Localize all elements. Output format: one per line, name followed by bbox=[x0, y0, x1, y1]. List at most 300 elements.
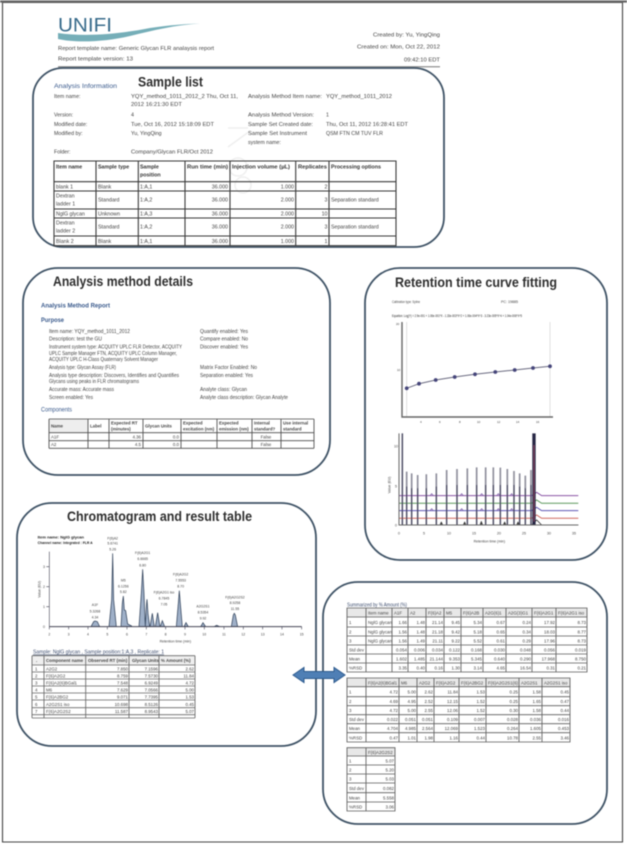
table: summary part 1: 21.11 bbox=[432, 638, 444, 644]
table: summary part 2: 12.15 bbox=[447, 699, 459, 704]
table: summary part 3: %RSD bbox=[349, 804, 362, 810]
table: summary part 1: 5.34 bbox=[473, 620, 483, 625]
table: component results: M6 bbox=[46, 688, 53, 692]
table: summary part 3: F(6)A2G2S2 bbox=[368, 750, 393, 755]
table: component results: 7.548 bbox=[117, 680, 129, 686]
table: summary part 1: 0.168 bbox=[471, 648, 483, 652]
table: summary part 1: 9.42 bbox=[451, 630, 461, 634]
table: components: 4.36 bbox=[132, 434, 142, 440]
analysis information text: Folder: bbox=[54, 150, 70, 156]
purpose text block: Screen enabled: Yes bbox=[49, 395, 93, 401]
chart: glycan chromatogram: 6.7845 bbox=[159, 596, 169, 600]
table: summary part 2: 12.06 bbox=[447, 708, 459, 713]
table: component results: Component name bbox=[46, 658, 84, 663]
table: sample list: ladder 1 bbox=[56, 202, 75, 208]
table: summary part 1 bbox=[347, 608, 587, 672]
purpose text block: Accurate mass: Accurate mass bbox=[49, 387, 114, 393]
chart: overlaid dextran ladder chromatograms: 10 bbox=[394, 445, 398, 449]
table: component results: 2 bbox=[35, 674, 38, 678]
table: component results: 11.84 bbox=[183, 674, 195, 678]
table: summary part 1: A2G(3)G1 bbox=[508, 610, 529, 616]
table: summary part 1: 18.03 bbox=[544, 630, 556, 634]
table: summary part 1: 1.485 bbox=[414, 656, 426, 662]
table: sample list: 1:A,1 bbox=[140, 184, 152, 190]
table: sample list: 36.000 bbox=[212, 224, 228, 230]
table: summary part 1: 0.31 bbox=[546, 666, 556, 670]
chart: glycan chromatogram: Channel name: Integrated : FLR A bbox=[38, 541, 93, 545]
table: summary part 2: 1.01 bbox=[407, 736, 417, 740]
chart: overlaid dextran ladder chromatograms: 0 bbox=[398, 531, 400, 535]
table: summary part 2: A2G2S1 bbox=[521, 680, 538, 686]
table: sample list: 1:A,3 bbox=[140, 212, 152, 218]
table: summary part 2: 1.52 bbox=[476, 699, 486, 704]
table: summary part 2: 3 bbox=[349, 708, 352, 713]
table: components: Internal bbox=[254, 420, 270, 426]
analysis information text: Analysis Information bbox=[54, 84, 117, 90]
table: summary part 3: Std dev bbox=[349, 786, 365, 791]
table: summary part 1: 1.56 bbox=[398, 630, 408, 634]
chart: glycan chromatogram: 4.34 bbox=[92, 615, 98, 619]
chart: overlaid dextran ladder chromatograms: 25 bbox=[522, 531, 526, 535]
chart: glycan chromatogram: 9.92 bbox=[200, 617, 206, 621]
purpose text block: Glycans using peaks in FLR chromatograms bbox=[49, 379, 139, 385]
table: summary part 1: NglG glycan bbox=[368, 620, 392, 625]
table: summary part 3: 5.03 bbox=[385, 776, 395, 782]
analysis information text: Version: bbox=[54, 112, 73, 118]
table: summary part 1: 0.67 bbox=[496, 620, 506, 625]
table: components: excitation (nm) bbox=[183, 426, 215, 432]
table: component results: 5.00 bbox=[185, 688, 195, 692]
analysis information text: Yu, YingQing bbox=[131, 131, 162, 137]
table: sample list: 10 bbox=[322, 212, 328, 218]
line chart: calibration curve: 8 bbox=[459, 420, 461, 424]
table: components: 4.5 bbox=[135, 442, 142, 447]
table: summary part 1: 0.65 bbox=[496, 630, 506, 634]
table: summary part 2: F(6)A2G2 bbox=[436, 680, 456, 686]
table: summary part 1: F(6)A2G1 iso bbox=[558, 610, 585, 616]
table: component results: 5 bbox=[35, 694, 38, 700]
table: component results: 7.7395 bbox=[145, 694, 159, 700]
table: component results: Observed RT (min) bbox=[88, 658, 128, 663]
chart: glycan chromatogram: 10 bbox=[202, 632, 206, 636]
table: summary part 2: 0.036 bbox=[530, 717, 542, 722]
table: summary part 1: 1.56 bbox=[398, 638, 408, 644]
table: summary part 1: 0.048 bbox=[520, 648, 532, 652]
table: summary part 1: 0.019 bbox=[575, 648, 587, 652]
chart: glycan chromatogram: 15 bbox=[300, 632, 304, 636]
table: component results: A2G2 bbox=[46, 666, 58, 672]
chart: overlaid dextran ladder chromatograms: Value (EU) bbox=[388, 477, 392, 493]
table: summary part 1: F(6)A2G1 bbox=[534, 610, 554, 616]
table: summary part 1: 1.66 bbox=[398, 620, 408, 625]
table: summary part 1: 16.54 bbox=[520, 666, 532, 670]
purpose text block bbox=[41, 318, 288, 401]
chart: glycan chromatogram: 8.70 bbox=[177, 584, 184, 588]
line chart: calibration curve: 12 bbox=[497, 420, 501, 424]
table: component results: F(6)A2(6)BGal1 bbox=[46, 680, 78, 686]
table: component results: 8.9543 bbox=[145, 709, 159, 714]
analysis information text: Item name: bbox=[54, 94, 80, 100]
table: sample list: blank 1 bbox=[56, 184, 73, 190]
table: summary part 1: 0.122 bbox=[449, 648, 461, 652]
icon: UNIFI logo bbox=[58, 16, 200, 41]
table: components: 0.0 bbox=[173, 442, 180, 447]
chart: glycan chromatogram: 13 bbox=[261, 632, 265, 636]
table: summary part 1: 21.18 bbox=[432, 630, 444, 634]
analysis information text: QSM FTN CM TUV FLR bbox=[326, 131, 383, 137]
table: summary part 1: 21.144 bbox=[430, 656, 444, 662]
purpose text block: Compare enabled: No bbox=[200, 336, 248, 342]
chart: glycan chromatogram: 8.5354 bbox=[198, 611, 208, 615]
panel: retention time curve fitting bbox=[365, 268, 607, 560]
table: sample list: ladder 2 bbox=[56, 228, 75, 234]
table: sample list: 1:A,1 bbox=[140, 239, 152, 245]
table: summary part 2: F(6)A2G2S1(6) bbox=[488, 680, 519, 686]
sample caption: Sample: NglG glycan , Sample position:1:A,3 , Replicate: 1 bbox=[33, 650, 164, 656]
purpose text block: Matrix Factor Enabled: No bbox=[200, 365, 257, 371]
table: summary part 3 bbox=[347, 748, 395, 811]
line chart: calibration curve: 20 bbox=[396, 322, 400, 326]
table: component results: 0.45 bbox=[185, 702, 195, 707]
table: component results: F(6)A2G2S2 bbox=[46, 709, 71, 714]
table: components: Glycan Units bbox=[145, 424, 172, 428]
table: component results: . bbox=[36, 658, 37, 663]
chart: glycan chromatogram: A1F bbox=[92, 603, 98, 607]
line chart: calibration curve: 16 bbox=[536, 420, 540, 424]
calibration details: Calibration type: Spline bbox=[392, 300, 420, 304]
table: summary part 3: 3 bbox=[349, 776, 352, 782]
chart: glycan chromatogram: F(6)A2G1 iso bbox=[154, 591, 174, 595]
table: summary part 2: 1.16 bbox=[449, 736, 459, 740]
table: summary part 2: 1.58 bbox=[532, 708, 542, 713]
table: summary part 1: 0.29 bbox=[522, 638, 532, 644]
table: summary part 2: A2G2 bbox=[419, 680, 431, 686]
chart: glycan chromatogram: F(6)A2G2S2 bbox=[225, 595, 245, 599]
analysis information text: system name: bbox=[248, 140, 281, 146]
table: sample list: 3 bbox=[325, 198, 328, 204]
table: sample list: 1:A,2 bbox=[140, 224, 152, 230]
table: summary part 2: 0.44 bbox=[476, 736, 486, 740]
table: summary part 2: 1.52 bbox=[476, 708, 486, 713]
analysis information text: Thu, Oct 11, 2012 16:28:41 EDT bbox=[326, 122, 409, 128]
table: summary part 2: 4.704 bbox=[387, 726, 399, 731]
table: summary part 2: 1.58 bbox=[532, 690, 542, 694]
table: components: A2 bbox=[51, 442, 57, 447]
table: summary part 3: 0.082 bbox=[383, 786, 395, 791]
table: component results: 9.071 bbox=[117, 694, 129, 700]
chart: glycan chromatogram: 7 bbox=[145, 632, 147, 636]
report template details bbox=[58, 46, 215, 62]
subheading: analysis method report: Analysis Method Report bbox=[41, 304, 110, 310]
chart: glycan chromatogram: 8.9258 bbox=[230, 601, 240, 605]
line chart: calibration curve: 6 bbox=[439, 420, 441, 424]
table: sample list: Standard bbox=[98, 224, 120, 230]
table: summary part 2: 0.264 bbox=[507, 726, 519, 731]
table: summary part 2: 4.72 bbox=[389, 708, 399, 713]
analysis information text: Sample Set Instrument bbox=[248, 131, 308, 137]
table: summary part 2: 0.007 bbox=[474, 717, 486, 722]
table: summary part 2: 1.605 bbox=[530, 726, 542, 731]
table: summary part 1: 1.48 bbox=[416, 620, 426, 625]
line chart: calibration curve: 10 bbox=[477, 420, 481, 424]
table: summary part 2: 4.69 bbox=[389, 699, 399, 704]
analysis information text: Sample Set Created date: bbox=[248, 122, 313, 128]
table: component results: 4.72 bbox=[185, 680, 195, 686]
calibration details: Equation: Log(Y) = 2.9e-001 + 1.06e-001*X - 1.33e-003*X^2 + 1.06e-004*X^3 - 3.23e-005*X^4 + 1.04e-006*X^5 bbox=[392, 314, 522, 318]
table: sample list: Processing options bbox=[331, 164, 381, 170]
table: sample list: 1.000 bbox=[281, 184, 294, 190]
table: components: False bbox=[261, 442, 272, 447]
table: summary part 1: NglG glycan bbox=[368, 630, 392, 634]
table: component results: 1.53 bbox=[185, 694, 195, 700]
table: summary part 2: 4.985 bbox=[405, 726, 417, 731]
table: sample list: 2 bbox=[325, 184, 328, 190]
analysis information text: 1 bbox=[326, 112, 329, 118]
chart: glycan chromatogram: 11 bbox=[222, 632, 226, 636]
table: summary part 1: 0.34 bbox=[522, 630, 532, 634]
table: sample list: Separation standard bbox=[331, 198, 379, 204]
table: summary part 1: 0.16 bbox=[434, 666, 444, 670]
chart: glycan chromatogram: 7.5553 bbox=[175, 578, 186, 582]
table: sample list: 36.000 bbox=[212, 184, 228, 190]
chart: glycan chromatogram: M5 bbox=[121, 579, 126, 583]
table: summary part 2: M6 bbox=[401, 680, 408, 686]
chart: overlaid dextran ladder chromatograms: 5 bbox=[395, 485, 397, 489]
table: summary part 2: 0.25 bbox=[509, 699, 519, 704]
table: component results: 6.9249 bbox=[145, 680, 159, 686]
table: summary part 1: NglG glycan bbox=[368, 638, 392, 644]
table: summary part 1: 1 bbox=[349, 620, 352, 625]
analysis information text: Analysis Method Item name: bbox=[248, 94, 322, 100]
table: summary part 2: F(6)A2BG2 bbox=[461, 680, 484, 686]
table: summary part 1: F(6)A2B bbox=[463, 610, 479, 616]
table: summary part 3: 2 bbox=[349, 768, 352, 772]
table: component results: 5.07 bbox=[185, 709, 195, 714]
chart: glycan chromatogram: 3 bbox=[68, 632, 70, 636]
purpose text block: Analyte class: Glycan bbox=[200, 387, 247, 393]
table: summary part 1: 17.968 bbox=[542, 656, 556, 662]
table: summary part 2: 2 bbox=[349, 699, 352, 704]
chart: glycan chromatogram: A2G2S1 bbox=[196, 604, 210, 608]
table: summary part 2: 4.72 bbox=[389, 690, 399, 694]
table: sample list: Replicates bbox=[298, 164, 327, 170]
table: sample list: Standard bbox=[98, 198, 120, 204]
table: summary part 2: %RSD bbox=[349, 736, 362, 740]
table: summary part 2: 0.44 bbox=[560, 708, 570, 713]
table: sample list: Unknown bbox=[98, 212, 120, 218]
table: summary part 2: 0.47 bbox=[389, 736, 399, 740]
table: summary part 2: 2.55 bbox=[424, 708, 434, 713]
table: summary part 1: 21.14 bbox=[432, 620, 444, 625]
table: summary part 1: 0.030 bbox=[494, 648, 506, 652]
heading: sample list: Sample list bbox=[138, 74, 203, 90]
table: summary part 2: 0.45 bbox=[560, 690, 570, 694]
analysis information text: Modified date: bbox=[54, 122, 87, 128]
chart: glycan chromatogram: F(6)A2G1 bbox=[135, 551, 150, 555]
purpose text block: ACQUITY UPLC H-Class Quaternary Solvent Manager bbox=[49, 357, 158, 363]
table: summary part 1: 3.14 bbox=[473, 666, 483, 670]
table: summary part 1: 5.18 bbox=[473, 630, 483, 634]
table: sample list: 1.000 bbox=[281, 239, 294, 245]
chart: glycan chromatogram: 2 bbox=[43, 585, 45, 589]
table: summary part 1: 1.602 bbox=[396, 656, 408, 662]
chart: overlaid dextran ladder chromatograms bbox=[388, 433, 578, 544]
table: sample list: Dextran bbox=[56, 194, 75, 200]
chart: glycan chromatogram: 6 bbox=[126, 632, 128, 636]
chart: glycan chromatogram: 8 bbox=[165, 632, 167, 636]
chart: glycan chromatogram: 5.26 bbox=[109, 548, 116, 552]
table: summary part 2: 2.62 bbox=[424, 690, 434, 694]
purpose text block: Quantify enabled: Yes bbox=[200, 329, 248, 335]
table: summary part 3: 1 bbox=[349, 758, 352, 764]
heading: retention time curve fitting: Retention time curve fitting bbox=[395, 274, 557, 290]
analysis information text: Company/Glycan FLR/Oct 2012 bbox=[131, 150, 213, 156]
table: summary part 1: Item name bbox=[368, 610, 389, 616]
purpose text block: Description: test the GU bbox=[49, 336, 102, 342]
chart: glycan chromatogram: 7.05 bbox=[161, 602, 167, 606]
table: sample list: 2.000 bbox=[281, 198, 294, 204]
table: summary part 3: 3.06 bbox=[385, 804, 395, 810]
table: summary part 1: 1.48 bbox=[416, 630, 426, 634]
chart: glycan chromatogram: 6.6665 bbox=[137, 557, 148, 561]
table: summary part 3: 5.20 bbox=[385, 768, 395, 772]
arrow: double-headed link between result table and summary bbox=[293, 668, 345, 682]
table: component results: 7.1596 bbox=[145, 666, 159, 672]
table: components bbox=[49, 419, 314, 448]
chart: glycan chromatogram: 2 bbox=[48, 632, 50, 636]
table: sample list: Blank bbox=[98, 184, 112, 190]
table: summary part 1: 5.345 bbox=[471, 656, 483, 662]
table: summary part 1: A2G(6)1 bbox=[485, 610, 502, 616]
report template details: Report template name: Generic Glycan FLR analaysis report bbox=[58, 46, 215, 52]
table: summary part 1: 0.24 bbox=[522, 620, 532, 625]
analysis information text: YQY_method_1011_2012 bbox=[326, 94, 392, 100]
line chart: calibration curve: 10 bbox=[397, 368, 401, 372]
table: sample list: 2.000 bbox=[281, 224, 294, 230]
table: sample list: Separation standard bbox=[331, 224, 379, 230]
analysis information text: Tue, Oct 16, 2012 15:18:09 EDT bbox=[131, 122, 215, 128]
subheading: components: Components bbox=[41, 408, 72, 414]
table: summary part 2: 1.53 bbox=[476, 690, 486, 694]
analysis information text: Analysis Method Version: bbox=[248, 112, 314, 118]
table: component results: 6 bbox=[35, 702, 38, 707]
table: component results: % Amount (%) bbox=[161, 658, 191, 663]
table: component results: F(6)A2G2 bbox=[46, 674, 66, 678]
table: summary part 1: M5 bbox=[446, 610, 453, 616]
table: summary part 2: 0.022 bbox=[387, 717, 399, 722]
creation details bbox=[357, 32, 441, 64]
table: summary part 1: 8.73 bbox=[577, 638, 587, 644]
analysis information text: 4 bbox=[131, 112, 134, 118]
table: summary part 2: 1 bbox=[349, 690, 352, 694]
table: components: 0.0 bbox=[173, 434, 180, 440]
purpose text block: Analysis type description: Discovers, Identifies and Quantifies bbox=[49, 373, 179, 379]
chart: glycan chromatogram: 3 bbox=[43, 565, 45, 569]
table: sample list: 3 bbox=[325, 224, 328, 230]
table: sample list: 36.000 bbox=[212, 239, 228, 245]
table: components: Name bbox=[51, 424, 64, 428]
table: summary part 2: Mean bbox=[349, 726, 361, 731]
chart: glycan chromatogram: 1 bbox=[43, 605, 45, 609]
table: sample list: Injection volume (µL) bbox=[232, 164, 290, 170]
analysis information text bbox=[54, 84, 409, 156]
table: summary part 2: 5.00 bbox=[407, 690, 417, 694]
table: components: Expected RT bbox=[111, 420, 138, 426]
table: summary part 3: 5.07 bbox=[385, 758, 395, 764]
table: summary part 1: 8.750 bbox=[575, 656, 587, 662]
table: summary part 2: 5.00 bbox=[407, 708, 417, 713]
table: summary part 1: Mean bbox=[349, 656, 361, 662]
table: summary part 1: 0.056 bbox=[544, 648, 556, 652]
table: summary part 2: 0.453 bbox=[558, 726, 570, 731]
table: summary part 2: 1.65 bbox=[532, 699, 542, 704]
table: component results: 2.62 bbox=[185, 666, 195, 672]
table: summary part 1: 1.49 bbox=[416, 638, 426, 644]
table: component results: 7.0566 bbox=[145, 688, 159, 692]
table: summary part 2: 0.30 bbox=[509, 708, 519, 713]
creation details: 09:42:10 EDT bbox=[404, 58, 441, 64]
purpose text block: UPLC Sample Manager FTN, ACQUITY UPLC Column Manager, bbox=[49, 351, 177, 357]
table: component results: 7.5730 bbox=[145, 674, 159, 678]
analysis information text: YQY_method_1011_2012_2 Thu, Oct 11, bbox=[131, 94, 238, 100]
table: summary part 1: 8.77 bbox=[577, 630, 587, 634]
table: component results: F(6)A2BG2 bbox=[46, 694, 69, 700]
report template details: Report template version: 13 bbox=[58, 56, 133, 62]
table: summary part 1: 2 bbox=[349, 630, 352, 634]
table: component results: 10.698 bbox=[115, 702, 129, 707]
table: summary part 1: F(6)A2 bbox=[428, 610, 442, 616]
table: summary part 2: 0.028 bbox=[507, 717, 519, 722]
table: components: standard bbox=[283, 426, 302, 432]
table: components: Use internal bbox=[283, 420, 308, 426]
chart: glycan chromatogram: 4 bbox=[87, 632, 89, 636]
table: component results: 8.5126 bbox=[145, 702, 159, 707]
table: summary part 1: 9.22 bbox=[451, 638, 461, 644]
table: component results: A2G2S1 iso bbox=[46, 702, 70, 707]
table: summary part 2: 3.46 bbox=[560, 736, 570, 740]
table: summary part 1: 0.054 bbox=[396, 648, 408, 652]
table: summary part 2: 2.564 bbox=[422, 726, 434, 731]
chart: glycan chromatogram: F(6)A2 bbox=[107, 536, 118, 540]
table: components: Label bbox=[90, 424, 101, 428]
table: summary part 2: 0.47 bbox=[560, 699, 570, 704]
chart: glycan chromatogram: 9 bbox=[184, 632, 186, 636]
heading: chromatogram and result table: Chromatogram and result table bbox=[67, 508, 252, 524]
chart: glycan chromatogram: 5.3268 bbox=[90, 609, 100, 613]
chart: glycan chromatogram: 14 bbox=[280, 632, 284, 636]
table: sample list: Item name bbox=[56, 164, 82, 170]
chart: glycan chromatogram: Item name: NglG glycan bbox=[38, 535, 84, 539]
purpose text block: Separation enabled: Yes bbox=[200, 373, 253, 379]
table: summary part 1: Std dev bbox=[349, 648, 365, 652]
table: component results: 1 bbox=[35, 666, 38, 672]
table: summary part 1: 0.290 bbox=[520, 656, 532, 662]
table: sample list: 1 bbox=[325, 239, 328, 245]
table: sample list: Dextran bbox=[56, 220, 75, 226]
table: summary part 3: 5.558 bbox=[383, 796, 395, 800]
table: summary part 2 bbox=[347, 678, 570, 742]
line chart: calibration curve: 4 bbox=[420, 420, 422, 424]
analysis information text: Modified by: bbox=[54, 131, 83, 137]
table: summary part 2: Std dev bbox=[349, 717, 365, 722]
chart: glycan chromatogram: F(6)A2G2 bbox=[173, 573, 188, 577]
table: summary part 1: A2 bbox=[410, 610, 416, 616]
chart: overlaid dextran ladder chromatograms: 15 bbox=[472, 531, 476, 535]
chart: glycan chromatogram: Retention time (min) bbox=[160, 640, 191, 644]
table: summary part 1: 3 bbox=[349, 638, 352, 644]
table: summary part 2: 11.84 bbox=[447, 690, 459, 694]
table: component results: 7.629 bbox=[117, 688, 129, 692]
